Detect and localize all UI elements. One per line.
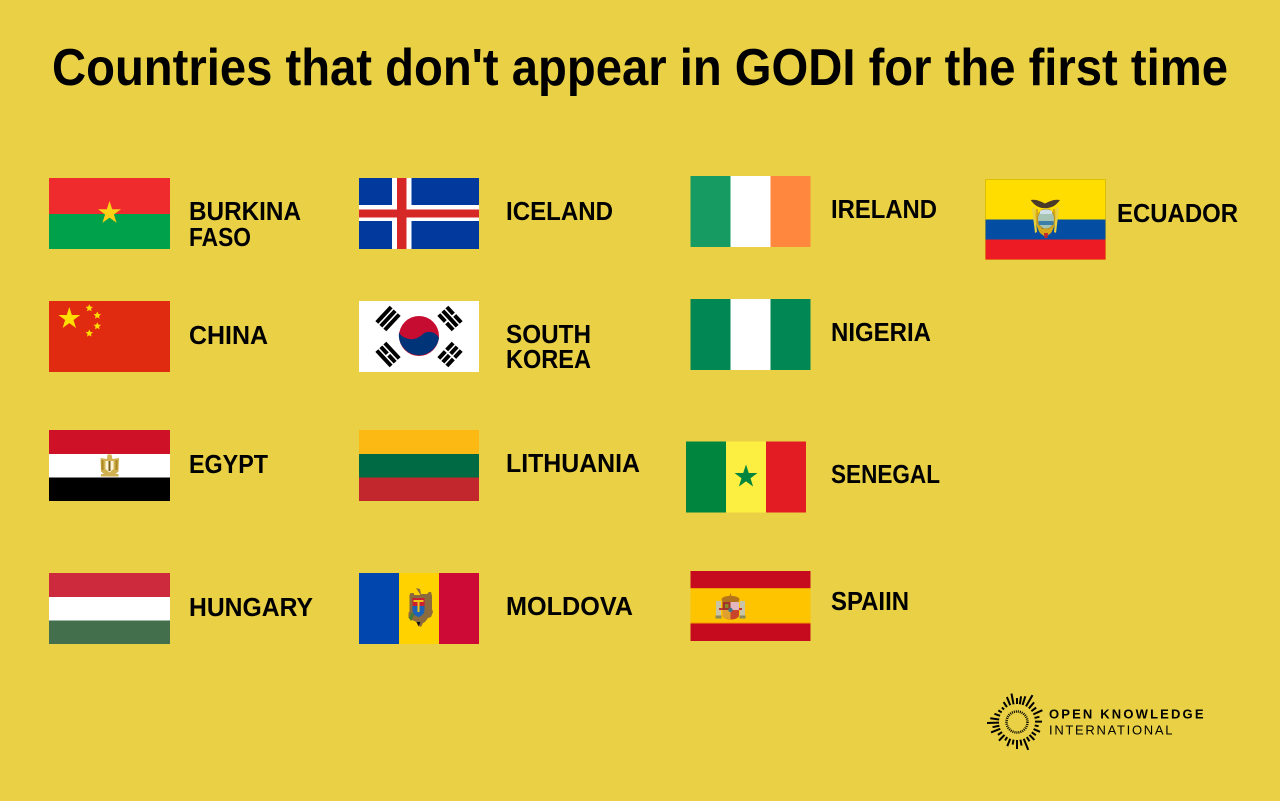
flag: Nigeria [690,299,810,370]
flag: China [49,301,170,372]
flag: Moldova [359,573,479,644]
label: South Korea [506,321,591,374]
logo text: OPEN KNOWLEDGE [1049,706,1204,722]
label: Spain: SPAIIN [831,588,909,616]
label: China: CHINA [189,322,268,350]
label: Nigeria: NIGERIA [831,319,931,347]
label: South Korea: SOUTH [506,321,591,349]
logo mark: sunburst [987,694,1042,750]
flag: Senegal [686,442,806,512]
label: Moldova: MOLDOVA [506,593,633,621]
label: Ecuador: ECUADOR [1117,200,1238,228]
label: Egypt: EGYPT [189,451,268,479]
flag: Hungary [49,573,170,644]
flag: South Korea [359,301,479,372]
logo text: INTERNATIONAL [1049,722,1172,738]
label: Burkina Faso: BURKINA [189,198,301,226]
flag: Iceland [359,178,479,249]
logo: Open Knowledge International [987,694,1204,750]
label: Iceland: ICELAND [506,198,613,226]
flag: Ecuador [986,180,1106,260]
flag: Ireland [690,176,810,247]
label: Senegal: SENEGAL [831,461,940,489]
label: Ireland: IRELAND [831,196,937,224]
label: Burkina Faso [189,198,301,252]
flag: Spain [690,571,810,641]
label: Burkina Faso: FASO [189,224,251,252]
flag: Burkina Faso [49,178,170,249]
flag: Egypt [49,430,170,501]
logo text [1049,706,1204,738]
flag: Lithuania [359,430,479,501]
label: Hungary: HUNGARY [189,594,313,622]
label: South Korea: KOREA [506,346,591,374]
label: Lithuania: LITHUANIA [506,450,640,478]
